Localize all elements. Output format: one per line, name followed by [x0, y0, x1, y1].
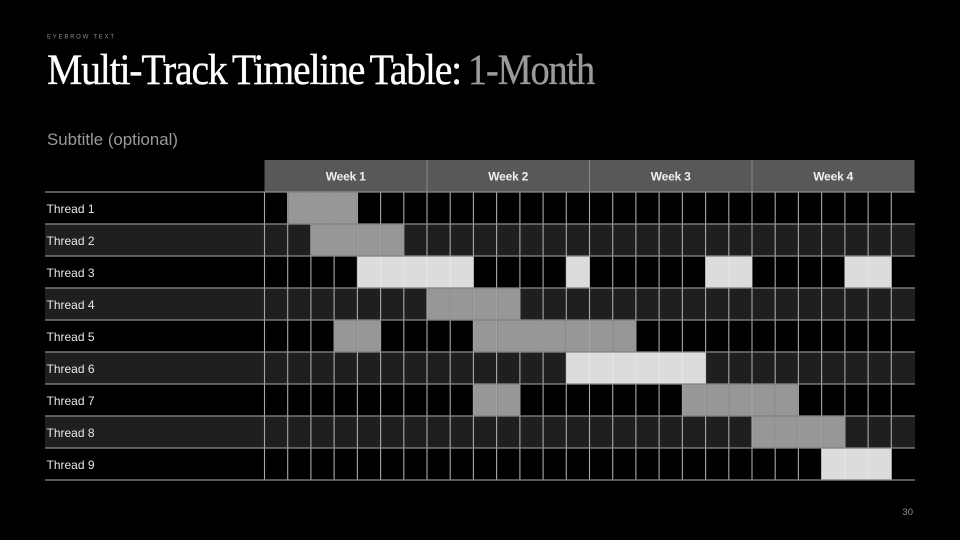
alternating row bands [45, 224, 915, 448]
week header: Week 4 [813, 170, 854, 184]
week header: Week 1 [326, 170, 366, 184]
row: Thread 2: Thread 2 [46, 234, 95, 248]
title: 1-Month [468, 47, 595, 94]
row: Thread 3: Thread 3 [46, 266, 95, 280]
row: Thread 1: Thread 1 [46, 202, 95, 216]
row: Thread 9: Thread 9 [46, 458, 95, 472]
row: Thread 6 [46, 353, 706, 383]
subtitle: Subtitle (optional) [47, 131, 178, 149]
row: Thread 2 [46, 225, 403, 255]
row: Thread 9 [46, 449, 891, 479]
week header [264, 160, 914, 192]
grid lines [45, 192, 915, 480]
row: Thread 5 [46, 321, 635, 351]
row: Thread 3 [46, 257, 891, 287]
row: Thread 4: Thread 4 [46, 298, 95, 312]
row: Thread 8: Thread 8 [46, 426, 95, 440]
row: Thread 8 [46, 417, 844, 447]
row: Thread 4 [46, 289, 519, 319]
row: Thread 7: Thread 7 [46, 394, 95, 408]
page number: 30 [902, 507, 913, 518]
eyebrow: EYEBROW TEXT [47, 34, 114, 40]
title: Multi-Track Timeline Table: [47, 47, 461, 94]
row: Thread 1 [46, 193, 357, 223]
row: Thread 6: Thread 6 [46, 362, 95, 376]
row: Thread 7 [46, 385, 798, 415]
timeline table [45, 160, 915, 480]
week header: Week 2 [488, 170, 529, 184]
row: Thread 5: Thread 5 [46, 330, 95, 344]
week header: Week 3 [651, 170, 691, 184]
